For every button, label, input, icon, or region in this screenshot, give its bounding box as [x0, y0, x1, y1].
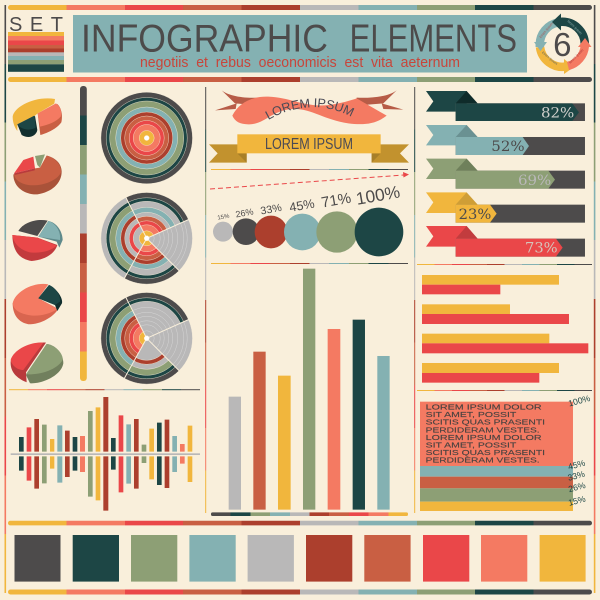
ribbon label: LOREM IPSUM: [263, 96, 356, 123]
cycle badge with number 6: [534, 14, 592, 74]
cycle badge with number 6: lorem ipsum: [541, 51, 558, 66]
divider above text block: [417, 390, 592, 391]
progress bar 23%: 23%: [459, 207, 491, 223]
header lower colour bar: [8, 77, 592, 82]
stack percentage labels: 45%: [567, 458, 586, 472]
title panel: [73, 15, 527, 72]
title: ELEMENTS: [341, 18, 517, 60]
paragraph: PERDIDERAM VESTES.: [426, 425, 540, 434]
frame: left vertical line: [4, 5, 6, 593]
cycle badge with number 6: lorem ipsum: [567, 19, 583, 36]
ribbon progress bars: [426, 91, 585, 257]
stack percentage labels: 33%: [567, 469, 586, 483]
progress bar 82%: [426, 91, 585, 122]
target chart 3: mostly greyed sectors: [101, 289, 192, 384]
stack percentage labels: [567, 393, 591, 508]
cycle badge with number 6: lorem ipsum: [568, 48, 585, 64]
divider above waveform: [9, 389, 200, 390]
target chart 1: concentric rings: [101, 92, 192, 184]
pie chart 1: [13, 98, 62, 137]
divider above paired bars: [417, 264, 592, 265]
progress bar 69%: 69%: [518, 173, 551, 189]
ribbon banner: yellow: [209, 134, 409, 163]
pie chart 4: [13, 284, 62, 324]
progress bar 73%: [426, 226, 585, 257]
percentage bubbles: 26%: [235, 207, 254, 220]
progress bar 73%: 73%: [525, 241, 558, 257]
palette swatches: [14, 535, 586, 582]
pie chart 5: [11, 343, 63, 383]
cycle badge with number 6: 6: [553, 26, 571, 63]
title: INFOGRAPHIC: [81, 18, 328, 60]
paragraph: LOREM IPSUM DOLOR: [426, 433, 542, 442]
stacked text panel: [420, 393, 591, 511]
paragraph: SIT AMET, POSSIT: [426, 440, 517, 449]
percentage bubbles: 15%: [217, 214, 231, 222]
SET label: SET: [9, 14, 63, 36]
percentage bubbles: 100%: [354, 181, 402, 209]
progress bar 69%: [426, 159, 585, 189]
stack percentage labels: 100%: [567, 393, 591, 408]
footer lower colour bar: [8, 590, 592, 594]
pie chart 2: [13, 154, 62, 194]
percentage bubbles: 33%: [260, 202, 283, 217]
divider above column chart: [211, 263, 408, 264]
column divider right: [414, 87, 415, 513]
cycle badge with number 6: lorem ipsum: [539, 22, 554, 39]
stack percentage labels: 15%: [567, 494, 587, 508]
column divider left: [205, 87, 206, 513]
ribbon banner: salmon: [215, 90, 403, 124]
target chart 2: sectors partly greyed: [101, 189, 192, 284]
stacked colour swatch: [8, 32, 64, 72]
vertical colour bar: [80, 86, 87, 381]
footer upper colour bar: [8, 521, 592, 525]
ribbon label: LOREM IPSUM: [265, 136, 353, 153]
stack percentage labels: 26%: [567, 480, 587, 494]
dashed trend arrow: [210, 172, 409, 189]
pie chart 3: [12, 220, 63, 261]
frame: right vertical line: [594, 5, 595, 593]
paragraph: [426, 402, 545, 465]
paragraph: SIT AMET, POSSIT: [426, 410, 517, 419]
paragraph: LOREM IPSUM DOLOR: [426, 402, 542, 411]
paired horizontal bar chart: [422, 275, 588, 383]
progress bar 52%: 52%: [491, 139, 525, 155]
column chart axis bar: [211, 512, 408, 516]
subtitle: negotiis et rebus oeconomicis est vita aeternum: [140, 55, 460, 71]
column chart: [229, 269, 390, 510]
waveform bar chart: [11, 397, 200, 511]
paragraph: PERDIDERAM VESTES.: [426, 456, 540, 465]
paragraph: SCITIS QUAS PRASENTI: [426, 448, 545, 457]
top colour bar: [8, 5, 592, 10]
percentage bubbles: 71%: [320, 190, 352, 212]
divider under ribbons: [211, 169, 408, 170]
percentage bubbles: 45%: [288, 197, 316, 215]
percentage bubbles: [213, 181, 403, 256]
progress bar 23%: [426, 192, 585, 223]
paragraph: SCITIS QUAS PRASENTI: [426, 418, 545, 427]
progress bar 52%: [426, 125, 585, 155]
progress bar 82%: 82%: [541, 106, 574, 122]
